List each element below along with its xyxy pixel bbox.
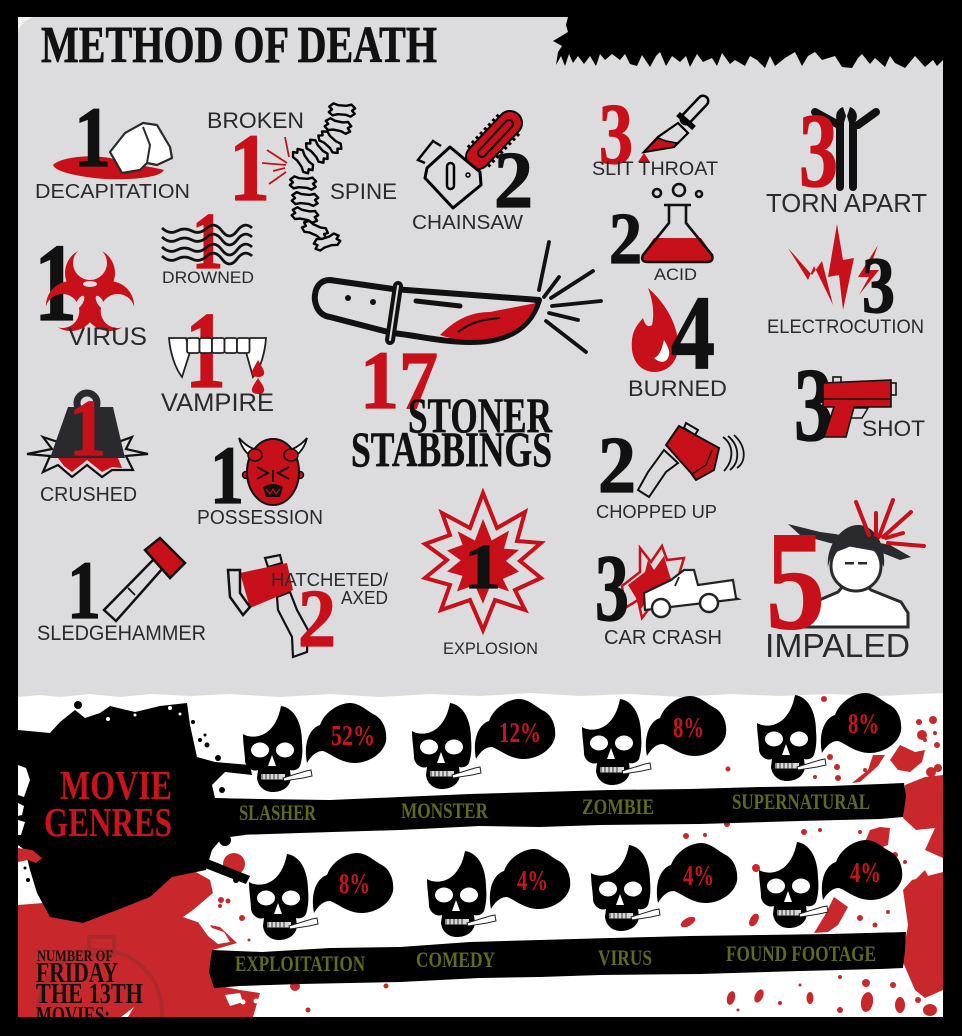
genre: comedy: 4% [517,866,548,897]
stat: hatcheted / axed: AXED [341,588,388,608]
stat: virus [34,222,147,351]
stat: burned: 4 [671,274,715,391]
stat: broken spine [207,103,397,252]
red splatter right side [679,696,943,1016]
stat: burned [628,274,727,401]
stat: decapitation: 1 [74,89,111,185]
red splatter bottom left [18,853,388,1017]
stat: impaled [765,500,924,664]
stat: drowned [162,196,254,287]
stat: vampire: VAMPIRE [161,389,274,417]
stat: drowned: DROWNED [162,268,254,287]
stat: crushed [27,383,148,506]
number 17: 17 [360,334,438,426]
stat: sledgehammer: SLEDGEHAMMER [37,622,206,645]
friday the 13th counter: THE 13TH [36,979,143,1010]
stat: drowned: 1 [192,196,223,286]
genre: found footage: 4% [850,858,881,889]
stat: torn apart: 3 [799,92,838,209]
stat: car crash: CAR CRASH [604,627,722,649]
label: STONER [408,387,553,443]
stat: sledgehammer [37,538,206,645]
genre: slasher: SLASHER [239,800,317,825]
stat: possession: 1 [210,429,244,521]
stat: explosion [425,493,541,658]
stat: sledgehammer: 1 [67,544,101,636]
genre: supernatural: 8% [848,709,879,740]
stat: possession: POSSESSION [197,507,323,529]
stat: explosion: 1 [464,531,501,602]
stat: slit throat: 3 [599,85,633,182]
stat: hatcheted / axed: HATCHETED/ [271,570,388,590]
stat: chopped up [596,420,744,522]
stat: shot: SHOT [862,416,925,441]
stat: possession [197,429,323,529]
white flecks in ink splat [18,706,182,835]
stat: decapitation: DECAPITATION [35,181,190,203]
genre: exploitation: EXPLOITATION [235,951,365,976]
heading: MOVIE [60,762,172,808]
torn black banner top right [553,17,943,68]
stat: chopped up: CHOPPED UP [596,502,717,522]
stat: stoner stabbings [315,242,601,477]
genre: found footage [726,840,902,966]
white flecks on red splatter [198,920,258,1006]
genre: exploitation [235,853,393,976]
stat: decapitation [35,89,190,203]
stat: explosion: EXPLOSION [443,639,538,658]
stat: broken spine: 1 [229,114,270,221]
stat: broken spine: BROKEN [207,108,304,133]
genre: supernatural: SUPERNATURAL [732,789,870,814]
friday the 13th counter: NUMBER OF [37,948,113,965]
heading: GENRES [44,799,172,845]
genre: slasher: 52% [331,721,375,752]
friday the 13th counter: MOVIES: [36,1003,110,1029]
friday the 13th counter [36,937,162,1036]
stat: slit throat [592,85,718,182]
stat: crushed: CRUSHED [40,484,137,506]
stat: impaled: 5 [766,503,825,659]
genre: zombie: ZOMBIE [582,794,654,819]
stat: electrocution [767,224,924,338]
stat: hatcheted / axed [228,555,388,664]
genre: virus: VIRUS [598,945,652,970]
stat: vampire [161,290,274,417]
genre: slasher [239,703,386,825]
genre: virus [591,843,737,970]
stat: impaled: IMPALED [765,627,910,664]
stat: shot [794,346,925,463]
stat: burned: BURNED [628,376,727,401]
stat: acid [609,184,712,284]
stat: shot: 3 [794,346,833,463]
stat: chainsaw: CHAINSAW [412,212,523,234]
genre: monster: 12% [499,718,541,749]
stat: crushed: 1 [69,383,106,473]
genre: zombie [582,696,726,819]
stat: electrocution: 3 [862,240,895,330]
stat: slit throat: SLIT THROAT [592,159,718,180]
stat: torn apart [766,92,927,218]
red fleck on ink splat [18,848,42,863]
stat: virus: 1 [34,222,77,345]
ribbon row 2 [209,932,906,988]
stat: torn apart: TORN APART [766,188,927,218]
genre: monster [401,699,555,823]
heading [44,762,172,845]
friday the 13th counter: FRIDAY [36,958,118,989]
stat: car crash: 3 [595,535,629,641]
genre: exploitation: 8% [339,869,370,900]
genre: virus: 4% [683,861,714,892]
big knife [315,242,601,352]
stat: chainsaw [412,123,533,234]
stat: electrocution: ELECTROCUTION [767,317,924,338]
stat: chainsaw: 2 [494,135,533,225]
stat: acid: ACID [654,265,697,284]
panel: method of death [18,17,943,699]
stat: virus: VIRUS [68,323,147,351]
black ink splat [18,701,252,923]
genre: comedy [416,849,570,972]
stat: broken spine: SPINE [330,179,397,204]
stat: stoner stabbings: STABBINGS [351,421,552,477]
stat: vampire: 1 [185,290,226,411]
title: METHOD OF DEATH [41,17,437,74]
stat: acid: 2 [609,198,642,279]
genre: zombie: 8% [673,713,704,744]
genre: comedy: COMEDY [416,947,495,972]
panel: movie genres [18,693,943,1036]
genre: monster: MONSTER [401,798,489,823]
genre: supernatural [732,693,901,814]
genre: found footage: FOUND FOOTAGE [726,941,876,966]
stat: car crash [595,535,738,649]
stat: chopped up: 2 [598,420,636,510]
ribbon row 1 [206,783,906,836]
stat: hatcheted / axed: 2 [298,572,336,664]
